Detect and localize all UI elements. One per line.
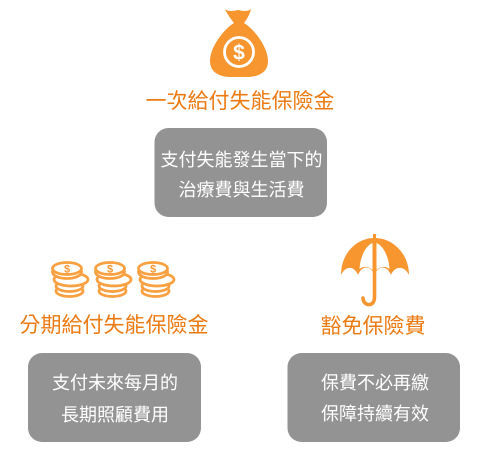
panel: lump sum description: 治療費與生活費 — [178, 180, 304, 200]
panel: lump sum description — [154, 128, 327, 217]
panel: installment description — [28, 353, 201, 442]
icon: coin stack 2: $ — [107, 264, 113, 276]
icon: coin stacks — [52, 262, 174, 296]
panel: installment description: 長期照顧費用 — [61, 405, 169, 425]
icon: money bag — [210, 9, 268, 77]
panel: waiver description — [288, 353, 460, 442]
icon: money bag: $ — [233, 42, 245, 64]
heading: installment benefit: 分期給付失能保險金 — [20, 314, 208, 337]
icon: coin stack 1: $ — [64, 264, 70, 276]
panel: installment description: 支付未來每月的 — [52, 373, 178, 393]
panel: waiver description: 保費不必再繳 — [321, 373, 429, 393]
heading: premium waiver: 豁免保險費 — [320, 315, 426, 338]
panel: waiver description: 保障持續有效 — [321, 404, 429, 424]
icon: coin stack 3: $ — [150, 264, 156, 276]
panel: lump sum description: 支付失能發生當下的 — [160, 150, 322, 170]
heading: lump sum benefit: 一次給付失能保險金 — [146, 90, 334, 113]
icon: umbrella — [341, 234, 409, 305]
